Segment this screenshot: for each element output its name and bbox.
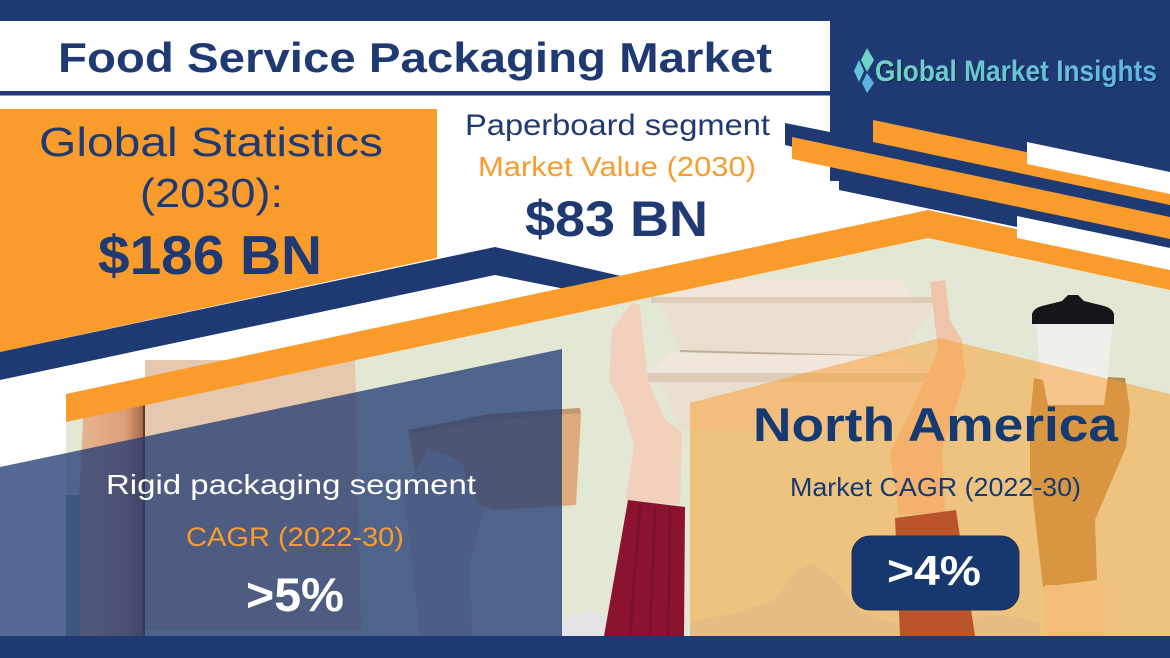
panel: paperboard segment: $83 BN [525,191,708,247]
photo: hand holding cup [1030,377,1130,636]
photo: coffee cup [1032,295,1114,408]
photo: food boxes [647,280,938,433]
photo: bowl and hand [404,408,581,636]
panel: paperboard segment: Paperboard segment [465,109,771,142]
navy roof line [0,247,625,380]
panel: paperboard segment [465,109,771,247]
title banner: Food Service Packaging Market [58,34,772,81]
photo: left hand and sleeve [604,303,685,636]
panel: rigid packaging [0,349,562,636]
photo: right hand and sleeve [890,280,975,636]
photo background [66,238,1170,636]
lower orange stripe [792,137,1170,239]
panel: paperboard segment: Market Value (2030) [478,151,756,182]
panel: global statistics [0,109,437,352]
panel: global statistics: $186 BN [98,224,322,286]
photo: paper bag and arm [66,360,361,636]
panel: rigid packaging: CAGR (2022-30) [186,522,404,552]
panel: global statistics: Global Statistics [39,119,383,165]
callout: north america CAGR [852,536,1019,610]
title banner [0,21,830,96]
top navy stripe [785,123,1170,240]
upper orange stripe [873,120,1170,205]
panel: rigid packaging: Rigid packaging segment [106,469,476,500]
logo [854,48,1158,93]
header bar background [0,0,1170,248]
panel: north america: Market CAGR (2022-30) [790,472,1081,502]
lower white stripe [1017,216,1170,270]
callout: north america CAGR: >4% [887,547,981,594]
panel: north america: North America [753,398,1119,451]
panel: rigid packaging: >5% [246,568,344,621]
orange roof line [66,210,1170,422]
panel: global statistics: (2030): [140,170,283,216]
upper white stripe [1027,142,1170,194]
panel: north america [690,338,1170,636]
footer bar [0,636,1170,658]
